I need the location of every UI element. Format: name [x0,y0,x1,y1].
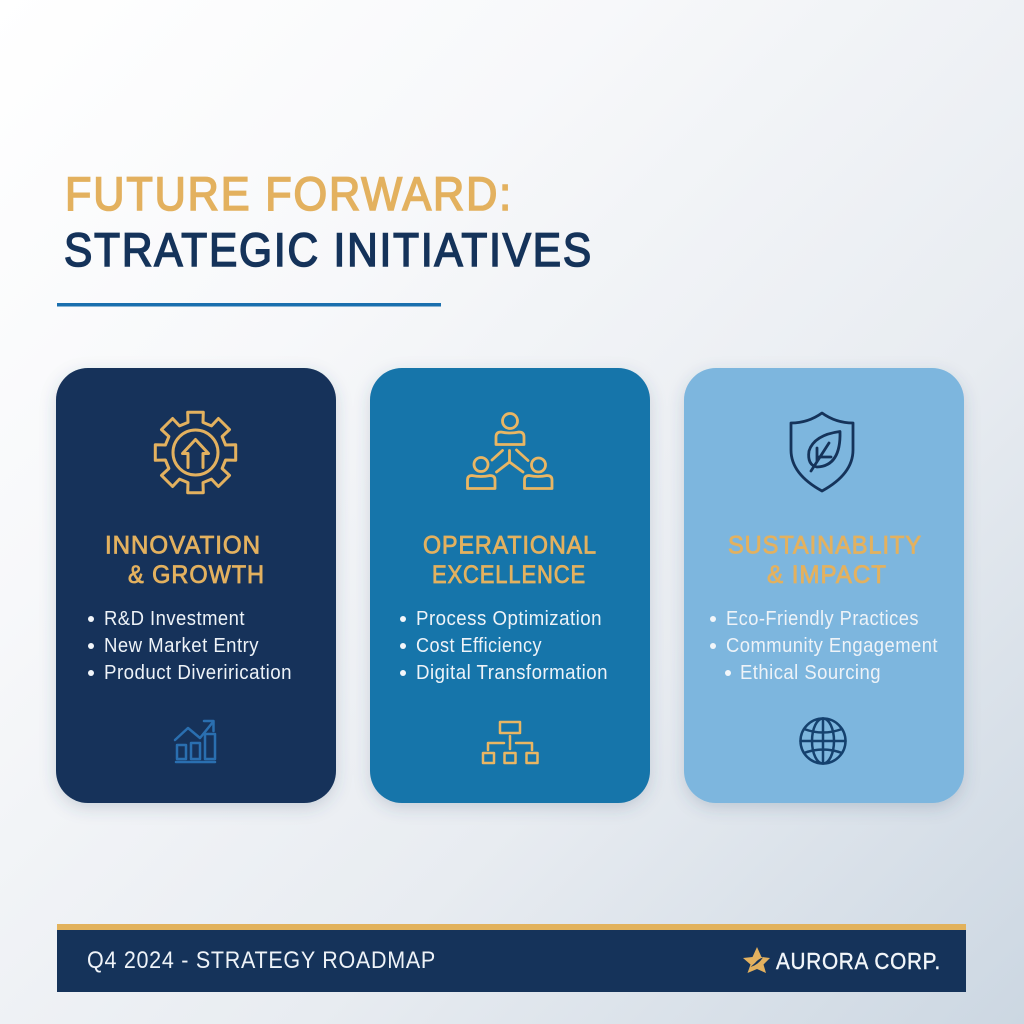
footer bar [57,924,966,992]
bullet list: Product Diverirication [104,662,292,684]
icon: growth chart [175,721,215,762]
bullet list [400,608,608,684]
bullet list: New Market Entry [104,635,259,657]
card background [684,368,964,803]
panel: operational excellence [370,368,650,803]
heading: & IMPACT [767,561,887,589]
footer left text: Q4 2024 - STRATEGY ROADMAP [87,947,436,974]
bullet list: R&D Investment [104,608,245,630]
icon: connected team [468,414,552,488]
heading: OPERATIONAL [423,532,597,560]
panel: sustainability and impact [684,368,964,803]
panel: innovation and growth [56,368,336,803]
bullet list: Digital Transformation [416,662,608,684]
card background [56,368,336,803]
heading [105,532,265,589]
footer navy band [57,930,966,992]
bullet list: Eco-Friendly Practices [726,608,919,630]
bullet list: Process Optimization [416,608,602,630]
heading: EXCELLENCE [432,561,586,589]
title [64,167,593,276]
bullet list [88,608,292,684]
footer brand: AURORA CORP. [776,948,941,974]
title line 2: STRATEGIC INITIATIVES [64,223,593,276]
icon: org chart [483,722,538,763]
heading [423,532,597,589]
heading: SUSTAINABLITY [728,532,922,560]
bullet list [710,608,938,684]
heading: INNOVATION [105,532,261,560]
icon: gear with up arrow [155,412,236,493]
icon: star logo [743,947,770,973]
card background [370,368,650,803]
title rule [57,303,441,306]
heading [728,532,922,589]
footer gold stripe [57,924,966,930]
icon: globe [800,718,846,764]
heading: & GROWTH [128,561,265,589]
title line 1: FUTURE FORWARD: [65,167,513,220]
bullet list: Cost Efficiency [416,635,542,657]
bullet list: Ethical Sourcing [740,662,881,684]
bullet list: Community Engagement [726,635,938,657]
icon: shield with leaf [791,413,853,491]
